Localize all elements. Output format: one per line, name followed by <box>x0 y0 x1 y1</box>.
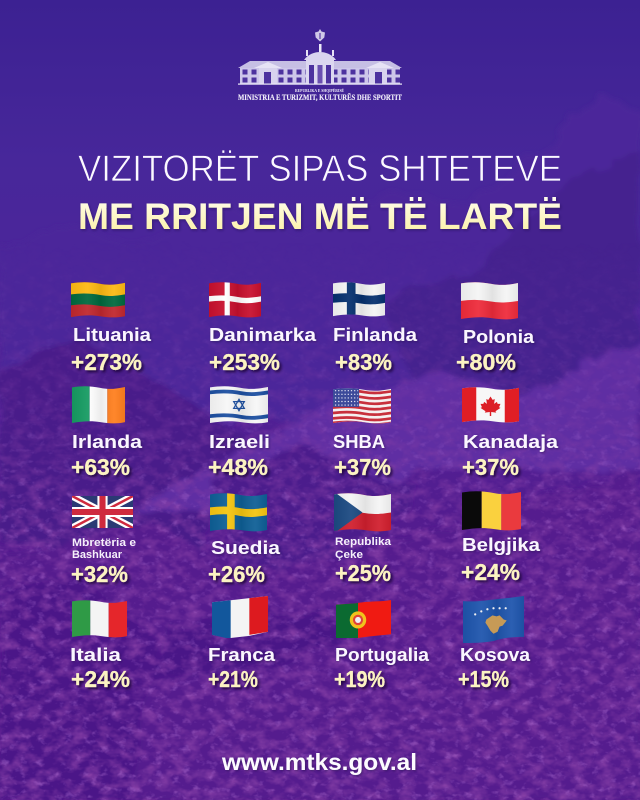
name: Portugalia <box>335 644 430 665</box>
flag: Portugal <box>336 600 391 638</box>
value: +253% <box>209 349 280 375</box>
value: +21% <box>208 666 258 692</box>
item: SHBA <box>331 387 393 480</box>
flag: Belgium <box>462 491 521 530</box>
flag: Poland <box>461 282 518 320</box>
heading line one: VIZITORËT SIPAS SHTETEVE <box>78 147 562 189</box>
value: +32% <box>71 561 128 587</box>
value: +24% <box>71 666 130 692</box>
item: Kosova <box>458 596 531 692</box>
icon: emblem <box>315 29 325 42</box>
icon: building <box>238 44 402 85</box>
logo text: republic: REPUBLIKA E SHQIPËRISË <box>295 88 344 93</box>
value: +19% <box>334 666 385 692</box>
value: +273% <box>71 349 142 375</box>
item: Franca <box>208 596 276 692</box>
item: Suedia <box>208 491 281 587</box>
item: Polonia <box>456 282 535 375</box>
flag: USA <box>333 388 391 424</box>
item: Belgjika <box>461 491 541 585</box>
value: +26% <box>208 561 265 587</box>
item: Italia <box>70 600 130 692</box>
item: Lituania <box>69 282 152 375</box>
name: Republika <box>335 536 392 548</box>
value: +80% <box>456 349 516 375</box>
name line two: Bashkuar <box>72 549 123 561</box>
value: +48% <box>208 454 268 480</box>
heading line two: ME RRITJEN MË TË LARTË <box>78 195 562 237</box>
flag: Canada <box>462 387 519 422</box>
name: Italia <box>70 644 122 665</box>
website url: www.mtks.gov.al <box>221 749 417 775</box>
value: +63% <box>71 454 130 480</box>
flag: Czech Republic <box>334 493 391 532</box>
flag: Italy <box>72 600 127 638</box>
name: Irlanda <box>72 431 143 452</box>
value: +25% <box>335 560 391 586</box>
name: Polonia <box>463 326 535 347</box>
flag: Israel <box>210 386 268 424</box>
name: Kosova <box>460 644 531 665</box>
item: Republika Çeke <box>332 491 393 586</box>
name line two: Çeke <box>335 549 363 561</box>
value: +37% <box>462 454 519 480</box>
name: Danimarka <box>209 324 317 345</box>
item: Danimarka <box>207 280 317 375</box>
name: Belgjika <box>462 534 541 555</box>
flag: Denmark <box>209 282 261 318</box>
item: Izraeli <box>208 386 270 480</box>
flag: Lithuania <box>71 282 125 318</box>
flag: United Kingdom <box>72 496 133 528</box>
name: Finlanda <box>333 324 418 345</box>
logo: ministry building <box>238 29 403 102</box>
name: Kanadaja <box>463 431 559 452</box>
name: Mbretëria e <box>72 537 136 549</box>
value: +83% <box>335 349 392 375</box>
item: Mbretëria e Bashkuar <box>71 496 136 587</box>
name: Franca <box>208 644 276 665</box>
item: Irlanda <box>71 386 143 480</box>
name: Izraeli <box>209 431 270 452</box>
value: +24% <box>461 559 520 585</box>
title <box>78 147 562 237</box>
flag: Ireland <box>72 386 125 424</box>
value: +37% <box>334 454 391 480</box>
item: Kanadaja <box>462 387 559 480</box>
logo text: ministry: MINISTRIA E TURIZMIT, KULTURËS DHE SPORTIT <box>238 93 403 102</box>
name: SHBA <box>333 431 385 452</box>
name: Lituania <box>73 324 152 345</box>
name: Suedia <box>211 537 281 558</box>
item: Portugalia <box>334 600 430 692</box>
flag: Sweden <box>210 493 267 532</box>
flag: France <box>212 596 268 638</box>
flag: Finland <box>333 282 385 316</box>
flag: Kosovo <box>463 596 524 643</box>
value: +15% <box>458 666 509 692</box>
item: Finlanda <box>331 280 418 375</box>
